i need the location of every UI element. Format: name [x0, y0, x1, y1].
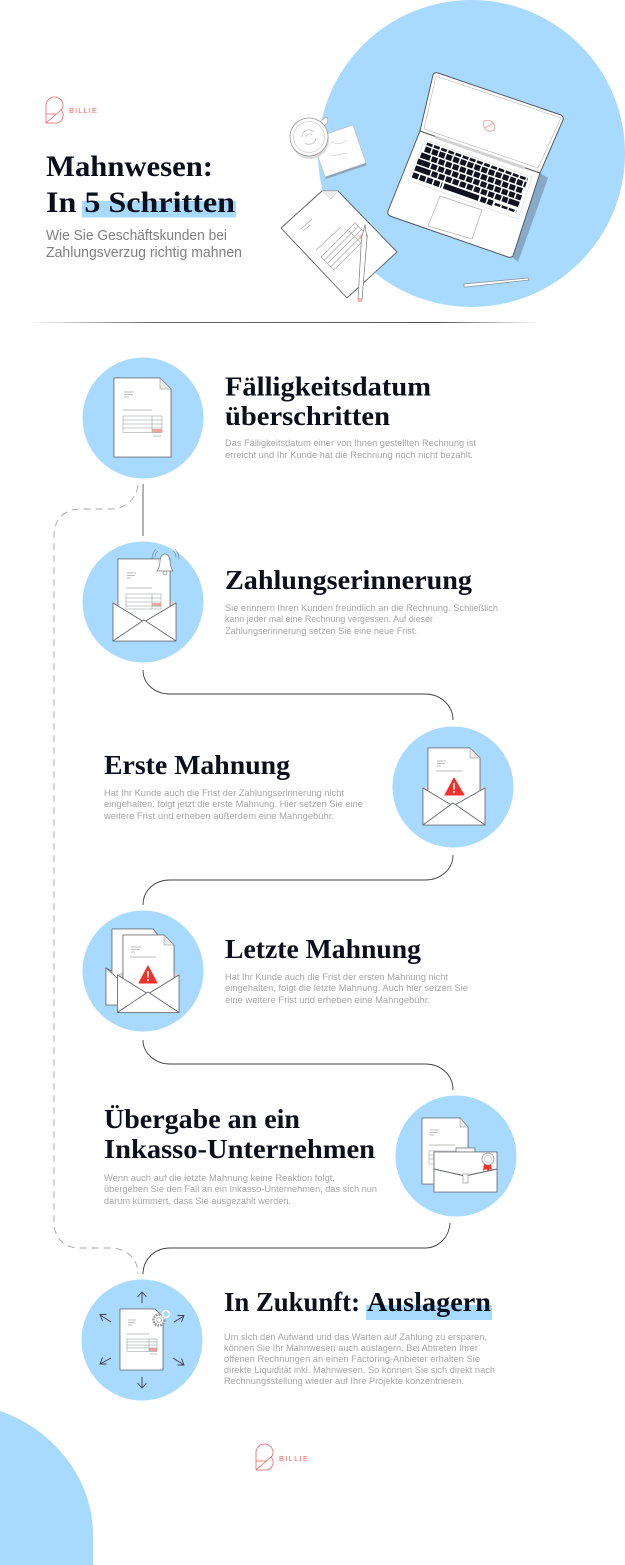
icon: envelope with invoice	[113, 559, 176, 641]
connector: step 1 to 2	[142, 484, 144, 536]
step 1 heading: überschritten	[225, 401, 390, 431]
step 5 text: Wenn auch auf die letzte Mahnung keine Reaktion folgt,	[104, 1173, 335, 1184]
icon: two envelopes with warning	[106, 929, 179, 1012]
step 6 heading	[224, 1287, 492, 1320]
step 4 text: eine weitere Frist und erheben eine Mahngebühr.	[225, 995, 430, 1006]
step 3 text: eingehalten, folgt jetzt die erste Mahnung. Hier setzen Sie eine	[104, 799, 363, 810]
step 2 text: Sie erinnern Ihren Kunden freundlich an die Rechnung. Schließlich	[225, 603, 498, 614]
step 6 text: Rechnungsstellung wieder auf Ihre Projekte konzentrieren.	[224, 1376, 464, 1387]
connector: step 5 to 6	[143, 1223, 450, 1274]
icon: bell	[152, 549, 179, 575]
step 3 text: Hat Ihr Kunde auch die Frist der Zahlungserinnerung nicht	[104, 788, 344, 799]
step 4 text: eingehalten, folgt die letzte Mahnung. Auch hier setzen Sie	[225, 983, 468, 994]
step 1 heading	[225, 372, 432, 431]
step 6 text: können Sie Ihr Mahnwesen auch auslagern. Bei Abtreten Ihrer	[224, 1343, 478, 1354]
connector: step 4 to 5	[143, 1040, 453, 1090]
icon: envelope with warning	[423, 748, 485, 825]
step 6 text: Um sich den Aufwand und das Warten auf Zahlung zu ersparen,	[224, 1332, 487, 1343]
background shape: bottom left	[0, 1411, 93, 1565]
step 2 heading: Zahlungserinnerung	[225, 565, 473, 595]
step 2 text: Zahlungserinnerung setzen Sie eine neue Frist.	[225, 626, 417, 637]
step 5 heading: Inkasso-Unternehmen	[104, 1134, 375, 1164]
connector: step 3 to 4	[143, 855, 453, 905]
logo: Billie footer: BILLIE	[279, 1454, 308, 1463]
step 1 text: erreicht und Ihr Kunde hat die Rechnung noch nicht bezahlt.	[225, 450, 473, 461]
icon: mug	[290, 117, 329, 159]
step 6 text: direkte Liquidität inkl. Mahnwesen. So können Sie sich direkt nach	[224, 1365, 495, 1376]
divider	[28, 322, 540, 323]
step 3 heading: Erste Mahnung	[104, 750, 291, 780]
icon: laptop	[388, 73, 563, 262]
panel: step 5 icon	[396, 1096, 516, 1216]
title: In 5 Schritten	[46, 186, 235, 219]
step 4 heading: Letzte Mahnung	[225, 934, 422, 964]
logo: Billie header	[46, 97, 97, 123]
step 5 text: übergeben Sie den Fall an ein Inkasso-Unternehmen, das sich nun	[104, 1184, 377, 1195]
panel: step 3 icon	[392, 726, 514, 848]
logo: Billie header: BILLIE	[69, 106, 97, 115]
step 6 heading: Auslagern	[367, 1287, 491, 1317]
step 6 heading: In Zukunft:	[224, 1287, 360, 1317]
step 1 heading: Fälligkeitsdatum	[225, 372, 432, 402]
dashed connector: outsourcing path	[54, 485, 138, 1274]
title: Mahnwesen:	[46, 150, 213, 183]
panel: step 4 icon	[82, 910, 204, 1032]
background circle: hero	[318, 0, 625, 307]
icon: invoice with gears	[120, 1309, 170, 1370]
step 4 text	[225, 972, 468, 1006]
step 2 text	[225, 603, 498, 637]
icon: pencil	[358, 225, 367, 300]
step 4 text: Hat Ihr Kunde auch die Frist der ersten Mahnung nicht	[225, 972, 448, 983]
panel: step 1 icon	[82, 358, 204, 478]
subtitle	[46, 227, 242, 261]
step 6 text: offenen Rechnungen an einen Factoring-Anbieter erhalten Sie	[224, 1354, 480, 1365]
step 3 text: weitere Frist und erheben außerdem eine Mahngebühr.	[103, 811, 334, 822]
icon: pen	[464, 278, 529, 287]
step 3 text	[103, 788, 363, 822]
logo: Billie footer	[256, 1444, 308, 1470]
step 5 heading: Übergabe an ein	[104, 1104, 300, 1134]
step 6 text	[224, 1332, 495, 1387]
icon: invoice and briefcase	[422, 1118, 497, 1192]
icon: invoice on desk	[281, 191, 397, 298]
title	[46, 150, 236, 219]
icon: arrows	[100, 1292, 184, 1388]
subtitle: Zahlungsverzug richtig mahnen	[46, 244, 242, 261]
illustration: desk with laptop	[281, 73, 563, 302]
step 5 text	[104, 1173, 377, 1207]
subtitle: Wie Sie Geschäftskunden bei	[46, 227, 227, 244]
icon: note	[312, 125, 366, 177]
step 1 text: Das Fälligkeitsdatum einer von Ihnen gestellten Rechnung ist	[225, 438, 476, 449]
connector: step 2 to 3	[143, 670, 453, 720]
icon: invoice	[114, 378, 171, 457]
step 5 heading	[104, 1104, 375, 1164]
panel: step 6 icon	[82, 1280, 202, 1400]
step 1 text	[225, 438, 476, 461]
step 5 text: darum kümmert, dass Sie ausgezahlt werden.	[104, 1196, 291, 1207]
panel: step 2 icon	[82, 542, 204, 662]
step 2 text: kann jeder mal eine Rechnung vergessen. Auf dieser	[225, 614, 433, 625]
